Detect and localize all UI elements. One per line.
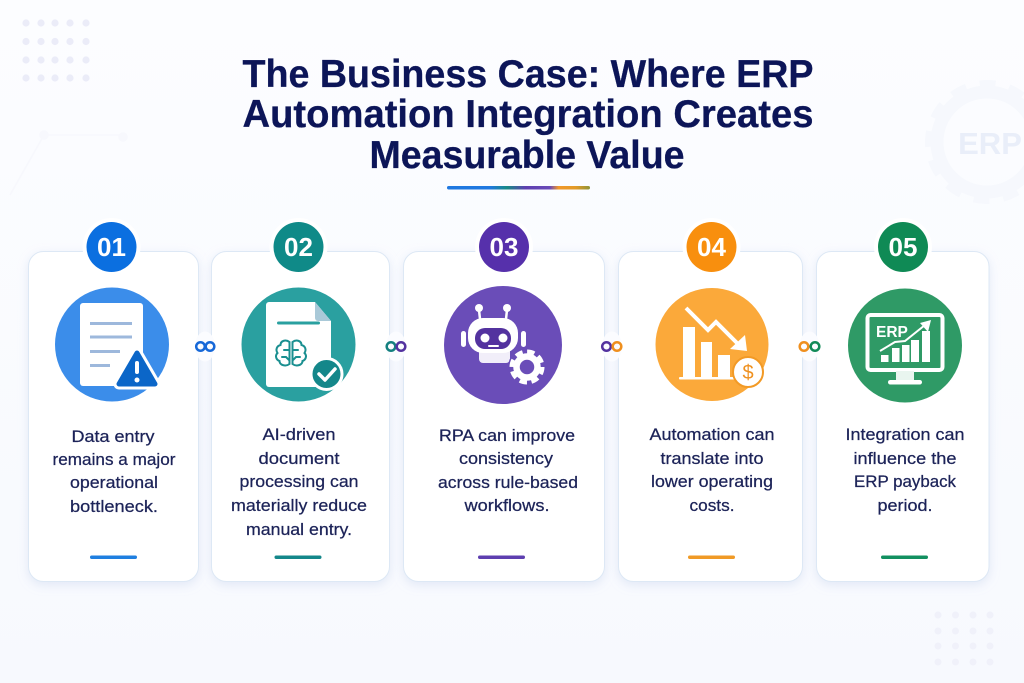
connector 3 to 4 bbox=[602, 332, 622, 362]
connector 4 to 5 bbox=[800, 332, 820, 362]
card 3 text bbox=[438, 427, 578, 515]
badge 01 bbox=[82, 218, 140, 276]
decorative circuit lines left bbox=[10, 131, 127, 195]
card 4 text bbox=[650, 426, 774, 515]
badge 02 bbox=[270, 218, 328, 276]
card 5 text: period. bbox=[878, 497, 932, 515]
decorative dot grid bottom right bbox=[934, 612, 994, 666]
decorative dot grid top left bbox=[22, 19, 90, 82]
card 2 text bbox=[231, 426, 367, 539]
badge 01: 01 bbox=[97, 232, 126, 262]
panel: card 3 bbox=[404, 218, 604, 582]
badge 05: 05 bbox=[889, 232, 917, 262]
icon: falling cost chart with dollar coin bbox=[656, 288, 768, 401]
card 4 text: lower operating bbox=[651, 473, 773, 491]
title: Automation Integration Creates bbox=[242, 93, 814, 136]
accent line bbox=[274, 556, 322, 559]
panel: card 1 bbox=[28, 218, 198, 582]
icon: document with warning bbox=[55, 288, 169, 402]
icon: ERP monitor with rising chart: ERP bbox=[876, 324, 908, 341]
card 5 text: influence the bbox=[854, 450, 956, 468]
panel: card 2 bbox=[212, 218, 390, 582]
icon: ERP monitor with rising chart bbox=[848, 288, 962, 402]
icon: falling cost chart with dollar coin: $ bbox=[742, 362, 754, 384]
icon: robot with gear bbox=[444, 286, 562, 404]
card 1 text: operational bbox=[70, 474, 158, 492]
card 2 text: document bbox=[258, 450, 340, 468]
accent line bbox=[90, 556, 137, 559]
card 1 text: bottleneck. bbox=[70, 498, 158, 516]
badge 04: 04 bbox=[697, 232, 726, 262]
panel: card 4 bbox=[618, 218, 802, 582]
accent line bbox=[478, 556, 525, 559]
card 2 text: processing can bbox=[240, 473, 358, 491]
card 4 text: translate into bbox=[660, 450, 764, 468]
card 5 text: Integration can bbox=[846, 426, 964, 444]
icon: document with brain and check bbox=[242, 288, 356, 402]
card 1 text bbox=[52, 428, 176, 516]
accent line bbox=[688, 556, 735, 559]
card 1 text: Data entry bbox=[72, 428, 155, 446]
card 3 text: workflows. bbox=[463, 497, 550, 515]
card 5 text: ERP payback bbox=[854, 473, 957, 491]
badge 04 bbox=[682, 218, 740, 276]
badge 02: 02 bbox=[284, 232, 313, 262]
badge 05 bbox=[874, 218, 932, 276]
card 5 text bbox=[846, 426, 964, 515]
watermark: ERP gear: ERP bbox=[958, 126, 1022, 161]
card 4 text: Automation can bbox=[650, 426, 774, 444]
card 3 text: consistency bbox=[459, 450, 554, 468]
title: The Business Case: Where ERP bbox=[242, 53, 814, 96]
connector 2 to 3 bbox=[386, 332, 406, 362]
card 2 text: AI-driven bbox=[262, 426, 336, 444]
title underline bbox=[447, 186, 590, 190]
watermark: ERP gear bbox=[932, 87, 1024, 197]
title: Measurable Value bbox=[370, 134, 684, 177]
card 3 text: across rule-based bbox=[438, 474, 578, 492]
card 2 text: materially reduce bbox=[231, 497, 367, 515]
accent line bbox=[881, 556, 928, 559]
badge 03: 03 bbox=[490, 232, 518, 262]
title bbox=[242, 53, 814, 177]
card 2 text: manual entry. bbox=[246, 521, 352, 539]
card 4 text: costs. bbox=[690, 497, 734, 515]
panel: card 5 bbox=[816, 218, 989, 582]
badge 03 bbox=[475, 218, 533, 276]
connector 1 to 2 bbox=[195, 332, 215, 362]
card 1 text: remains a major bbox=[52, 451, 176, 469]
card 3 text: RPA can improve bbox=[439, 427, 575, 445]
